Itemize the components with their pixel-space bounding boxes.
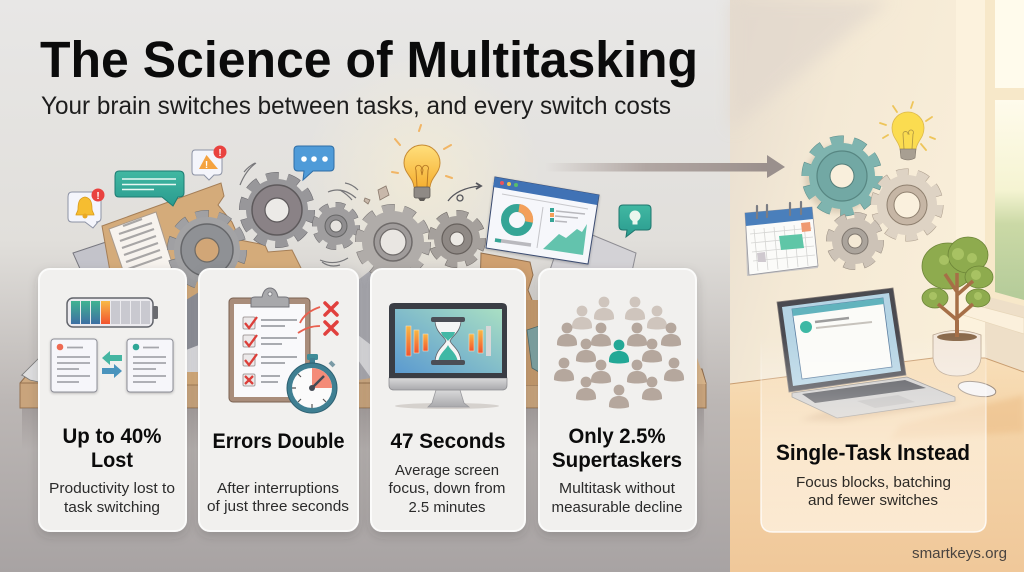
gear 4	[360, 209, 426, 275]
icon: teal gear	[805, 141, 877, 213]
card description	[388, 463, 506, 516]
gear 5	[432, 214, 482, 264]
panel description	[796, 474, 951, 509]
panel: single-task instead	[761, 335, 986, 532]
card title: Errors Double	[212, 430, 344, 453]
card description	[49, 481, 175, 516]
icon: bell notification	[68, 188, 104, 228]
icon: teal bulb bubble	[619, 205, 651, 237]
icon: warning notification: !	[205, 160, 208, 171]
background: left grey panel	[0, 0, 730, 572]
card title: Only 2.5%	[568, 425, 666, 448]
gear 1	[172, 215, 242, 285]
grey paper right	[540, 234, 636, 300]
card: only 2.5% supertaskers	[539, 269, 696, 531]
scattered desk clutter behind the cards	[20, 183, 706, 450]
icon: calendar	[745, 202, 818, 276]
debris between cards	[22, 186, 706, 385]
icon: bell notification: !	[96, 191, 100, 202]
source credit: smartkeys.org	[912, 546, 1007, 562]
icon: clipboard and stopwatch	[229, 288, 337, 413]
grey paper left	[22, 240, 200, 375]
desk plank	[20, 369, 706, 450]
card: up to 40% lost	[39, 269, 186, 531]
tan folder right	[480, 253, 560, 385]
tan folder left	[102, 183, 340, 385]
gear 2	[244, 177, 310, 243]
gear 3	[316, 206, 356, 246]
card title: Supertaskers	[552, 449, 682, 472]
panel description: and fewer switches	[808, 492, 938, 509]
icon: warning notification: !	[218, 148, 222, 159]
card description: focus, down from	[388, 481, 506, 497]
icon: crowd with one teal person	[554, 297, 684, 408]
icon: blue chat bubble	[294, 146, 334, 180]
icon: warning notification	[192, 146, 226, 180]
card: 47 seconds	[371, 269, 525, 531]
card description: 2.5 minutes	[408, 500, 486, 516]
icon: teal message bubble	[115, 171, 184, 206]
card title	[552, 425, 682, 472]
card description: Multitask without	[559, 481, 675, 497]
background: right sunny room	[730, 0, 1024, 572]
icon: draining battery and swapping documents	[51, 298, 173, 392]
card: errors double	[199, 269, 358, 531]
card description: of just three seconds	[207, 499, 349, 515]
icon: beige gear	[875, 173, 939, 237]
card title	[62, 425, 162, 472]
icon: monitor with hourglass	[389, 303, 507, 409]
card title: Up to 40%	[62, 425, 162, 448]
panel description: Focus blocks, batching	[796, 474, 951, 491]
document in folder	[109, 212, 172, 285]
card description: Average screen	[395, 463, 499, 479]
icon: laptop	[777, 288, 960, 422]
icon: yellow bulb	[880, 102, 935, 160]
card title: 47 Seconds	[390, 430, 506, 453]
icon: plant	[922, 237, 993, 376]
motion lines around gears	[240, 163, 358, 266]
card description: task switching	[64, 500, 160, 516]
icon: light bulb	[392, 125, 452, 201]
card description: measurable decline	[552, 500, 682, 516]
icon: small gear	[830, 216, 880, 266]
title: The Science of Multitasking	[40, 31, 698, 88]
card title: Lost	[91, 449, 133, 472]
card description: Productivity lost to	[49, 481, 175, 497]
card description: After interruptions	[217, 481, 339, 497]
dashboard window	[486, 177, 599, 264]
card description	[207, 481, 349, 515]
panel title: Single-Task Instead	[776, 440, 970, 465]
subtitle: Your brain switches between tasks, and every switch costs	[41, 92, 671, 120]
card description	[552, 481, 682, 516]
background: bulb glow	[302, 55, 542, 295]
arrow: from chaos to focus	[545, 155, 785, 178]
icon: mouse	[957, 379, 997, 399]
icon: curly arrow	[448, 183, 481, 201]
